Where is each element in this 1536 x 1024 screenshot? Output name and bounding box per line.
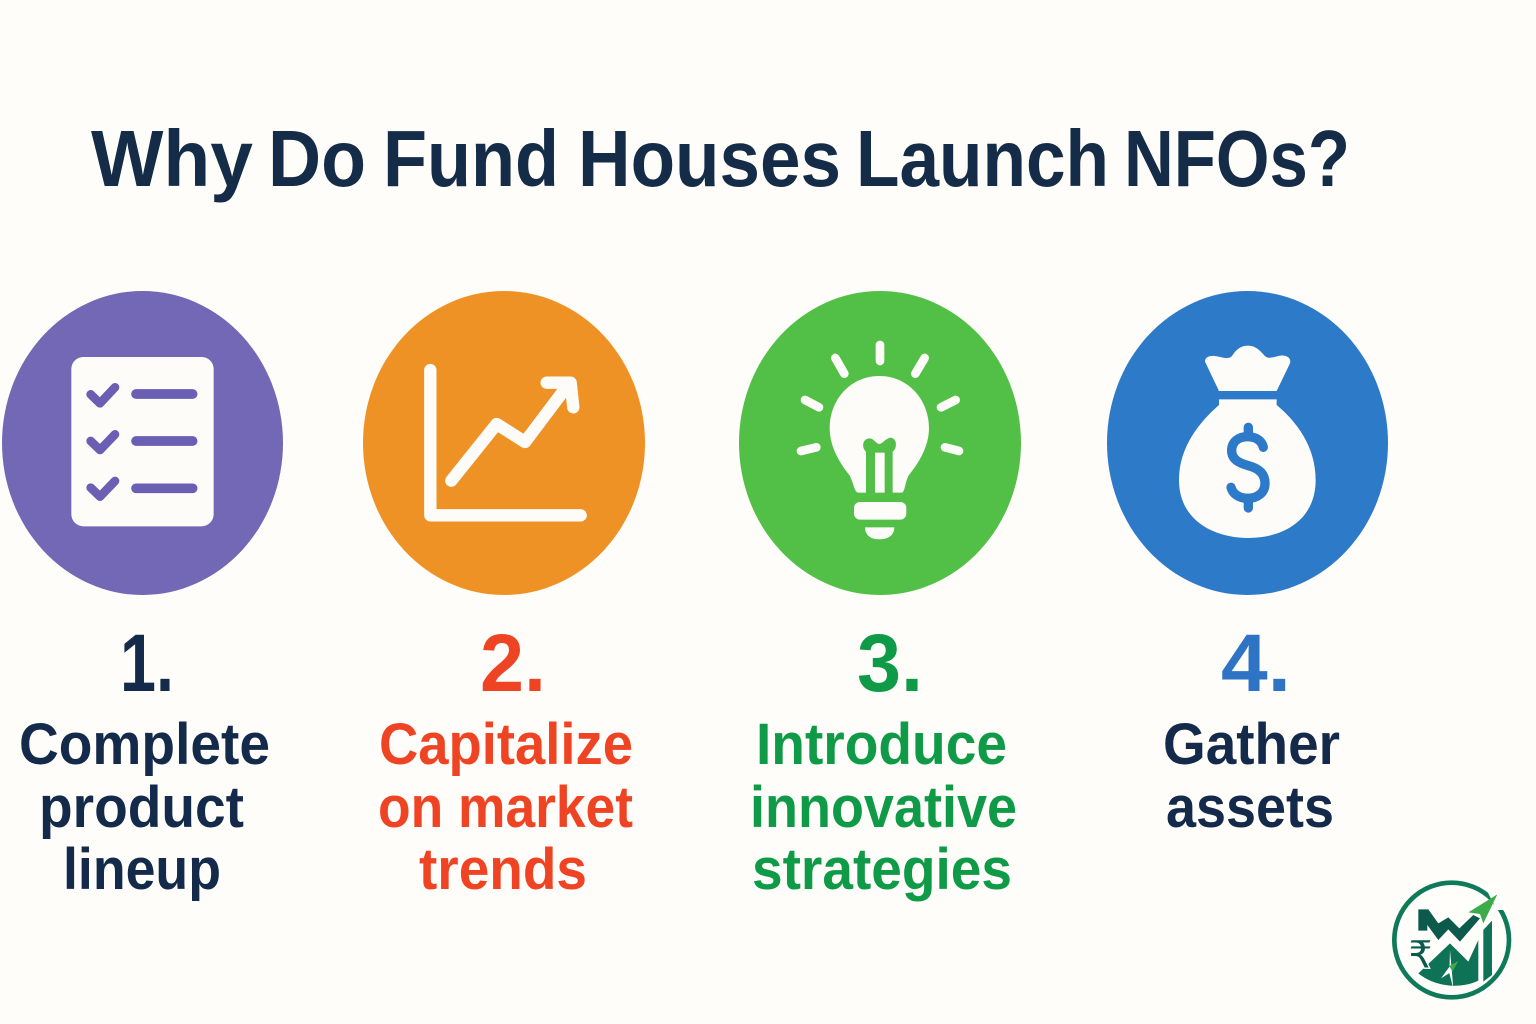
- title: Fund: [383, 114, 559, 203]
- label: introduce innovative strategies: Introduce: [756, 712, 1007, 777]
- label: gather assets: [1163, 712, 1340, 840]
- label: gather assets: Gather: [1163, 712, 1340, 777]
- number 1: 1.: [120, 618, 174, 709]
- label: gather assets: assets: [1166, 775, 1334, 840]
- icon: checklist in purple circle: [2, 291, 283, 595]
- title: Launch: [856, 114, 1109, 203]
- title: Houses: [578, 114, 841, 203]
- icon: light bulb in green circle: [739, 291, 1021, 595]
- icon: money bag in blue circle: [1107, 291, 1388, 595]
- logo: rupee growth emblem: ₹: [1409, 932, 1432, 976]
- label: introduce innovative strategies: [750, 712, 1017, 902]
- label: introduce innovative strategies: innovative: [750, 775, 1017, 840]
- title: NFOs?: [1124, 114, 1350, 203]
- icon: rising chart in orange circle: [363, 291, 645, 595]
- label: capitalize on market trends: trends: [419, 837, 587, 902]
- label: complete product lineup: Complete: [19, 712, 270, 777]
- title: Why: [91, 114, 253, 203]
- number 4: 4.: [1221, 618, 1291, 709]
- label: introduce innovative strategies: strategies: [752, 837, 1012, 902]
- panel: complete product lineup: [2, 291, 283, 902]
- label: capitalize on market trends: [378, 712, 633, 902]
- label: complete product lineup: lineup: [63, 837, 221, 902]
- label: complete product lineup: [19, 712, 270, 902]
- panel: capitalize on market trends: [363, 291, 645, 902]
- label: complete product lineup: product: [39, 775, 244, 840]
- title: Do: [268, 114, 366, 203]
- title: [91, 114, 1350, 203]
- label: capitalize on market trends: Capitalize: [379, 712, 633, 777]
- label: capitalize on market trends: on market: [378, 775, 633, 840]
- panel: introduce innovative strategies: [739, 291, 1021, 902]
- panel: gather assets: [1107, 291, 1388, 840]
- number 2: 2.: [480, 618, 546, 709]
- logo: rupee growth emblem: [1394, 883, 1509, 997]
- number 3: 3.: [857, 618, 923, 709]
